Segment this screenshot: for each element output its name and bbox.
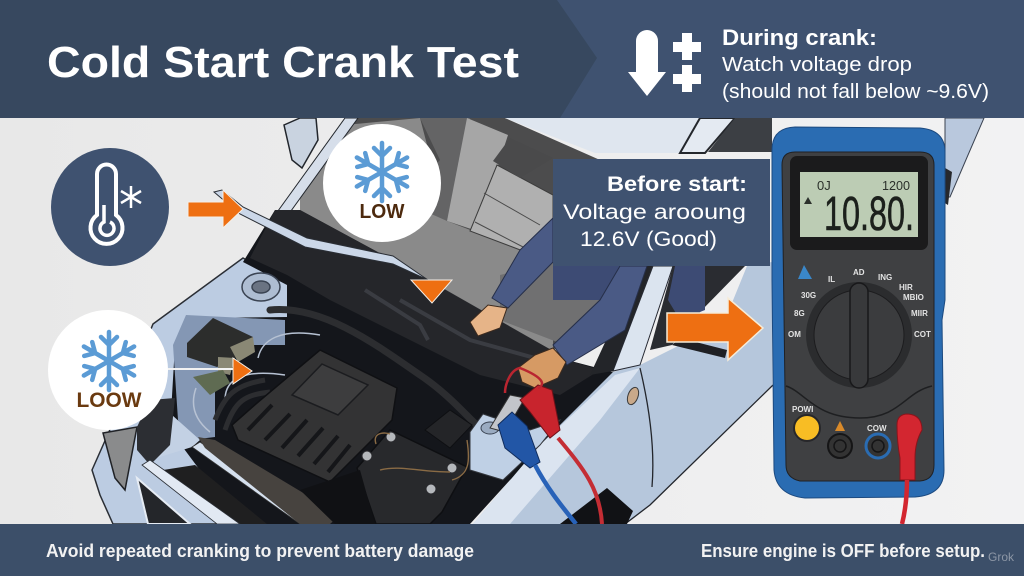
engine cover (232, 350, 397, 482)
headrest block (493, 138, 553, 178)
seat panel (470, 165, 553, 260)
red clip (520, 385, 560, 438)
lower seat (500, 262, 600, 345)
upper pillar (680, 118, 735, 153)
fender highlight band (473, 368, 640, 524)
dial labels: AD (853, 268, 865, 277)
battery wires (375, 433, 468, 480)
floor panel (300, 118, 553, 351)
connector line and arrow (168, 358, 252, 384)
side mirror strip (672, 338, 727, 358)
dark mirror behind meter (940, 165, 952, 205)
jacket torso (553, 266, 640, 300)
icon: snowflake (353, 143, 411, 201)
wheel arch (560, 488, 633, 524)
jacket behind window (668, 266, 705, 320)
footer left text: Avoid repeated cranking to prevent battery damage (46, 541, 474, 561)
turn signal (625, 386, 641, 406)
rotary dial (806, 282, 912, 388)
engine cover ribs (248, 405, 350, 472)
multimeter (772, 127, 945, 524)
roof beyond meter (945, 118, 984, 197)
beige connectors (218, 337, 255, 375)
battery cover box (425, 410, 472, 448)
title banner (0, 0, 597, 118)
hand upper (470, 305, 507, 336)
cow label: COW (867, 424, 887, 433)
during crank line 1: Watch voltage drop (722, 54, 912, 76)
icon: plus bottom (673, 65, 701, 92)
bay wires (194, 333, 320, 432)
illustration: car with open hood (92, 118, 984, 524)
pillar (613, 266, 673, 371)
meter face (782, 152, 934, 481)
during crank heading: During crank: (722, 25, 877, 50)
pow label: POWI (792, 405, 813, 414)
slam panel bracket (150, 407, 200, 460)
icon: plus top (673, 33, 701, 60)
dial labels: MBIO (903, 293, 924, 302)
during crank line 2: (should not fall below ~9.6V) (722, 81, 989, 103)
orange down triangle (411, 280, 452, 303)
meter outer case (772, 127, 945, 498)
title: Cold Start Crank Test (47, 38, 519, 87)
lcd top left: 0J (817, 178, 831, 193)
icon: small snow (121, 186, 141, 208)
grille (137, 478, 190, 524)
jacket arm lower (553, 266, 647, 365)
dial labels: ING (878, 273, 892, 282)
fuse box (187, 318, 253, 367)
watermark: Grok (988, 550, 1015, 564)
engine lower dark (300, 470, 375, 524)
dial labels (788, 268, 931, 339)
battery terminals (362, 432, 457, 494)
engine cover plate (292, 364, 368, 415)
blue lead (535, 465, 576, 524)
lcd bezel (790, 156, 928, 250)
dial labels: IL (828, 275, 835, 284)
windscreen sky reflection (505, 118, 712, 153)
footer bar (0, 524, 1024, 576)
dial labels: COT (914, 330, 931, 339)
hood underside dark base (300, 118, 600, 351)
icon: voltage down arrow (628, 30, 666, 96)
callout heading: Before start: (607, 173, 747, 196)
bay side dark (137, 398, 175, 465)
headlight (103, 427, 137, 490)
low badge (323, 124, 441, 242)
thermometer badge (51, 148, 169, 266)
left floor panel (400, 118, 470, 221)
curtain strip (447, 118, 508, 231)
light crossmember (192, 442, 323, 524)
hood dark band and bay (170, 210, 613, 524)
lcd reading: 10.80. (824, 188, 914, 241)
side interior (650, 266, 745, 350)
hood band lighter (250, 210, 600, 395)
blue clip (498, 412, 540, 468)
black port (828, 434, 852, 458)
icon: thermometer (90, 164, 122, 244)
lower panel curve (786, 386, 932, 418)
dial pointer (850, 283, 868, 388)
jacket arm upper (492, 218, 553, 308)
car side door (473, 262, 772, 524)
blue port (866, 434, 890, 458)
strut tower (470, 414, 560, 480)
radiator dark panel (163, 465, 267, 524)
hose (270, 310, 478, 426)
callout: before start (553, 159, 770, 266)
bumper edge light (142, 460, 240, 524)
red plug (897, 414, 922, 480)
dial labels: MIIR (911, 309, 928, 318)
upper side window (708, 118, 772, 152)
low label: LOW (360, 201, 405, 223)
callout line 2: 12.6V (Good) (580, 228, 717, 251)
door cut line (625, 368, 773, 524)
lcd screen (800, 172, 918, 237)
dial labels: 30G (801, 291, 816, 300)
pillar dark frame (590, 265, 653, 375)
looow badge (48, 310, 168, 430)
dial labels: 8G (794, 309, 805, 318)
dial labels: OM (788, 330, 801, 339)
hood edge (270, 118, 358, 222)
icon: snowflake (80, 332, 138, 390)
lcd top right: 1200 (882, 178, 910, 193)
wiper (365, 290, 560, 365)
orange arrow: thermometer to car (188, 190, 243, 228)
yellow button (794, 415, 820, 441)
hand lower (518, 348, 566, 388)
red loop cable (505, 368, 542, 393)
warning icon (835, 421, 845, 431)
footer right text: Ensure engine is OFF before setup. (701, 541, 985, 561)
dial labels: HIR (899, 283, 913, 292)
header bar (0, 0, 1024, 118)
prop rod (214, 190, 428, 280)
lcd warning glyph (804, 197, 812, 204)
icon: blue marker (798, 265, 812, 279)
strut bolt (481, 422, 499, 434)
battery (357, 430, 467, 524)
callout line 1: Voltage arooung (563, 201, 746, 224)
wing mirror (284, 118, 318, 168)
bay inner wall (173, 315, 285, 440)
metal clamp (490, 395, 525, 432)
radiator bar (198, 437, 340, 524)
red cable (902, 480, 907, 524)
seat cushion line (475, 193, 540, 248)
suspension tower (242, 273, 280, 301)
large orange arrow (667, 298, 763, 360)
looow label: LOOW (76, 389, 142, 412)
red lead (558, 438, 602, 524)
green connector (193, 370, 230, 395)
car body left (92, 258, 330, 524)
